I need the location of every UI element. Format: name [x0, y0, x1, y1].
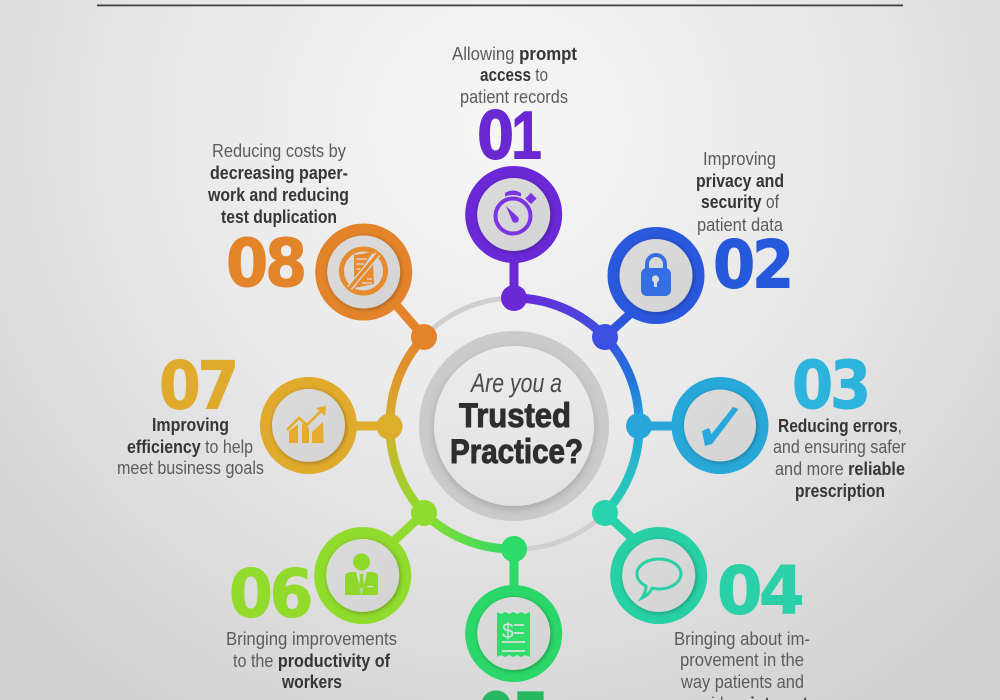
item 02 text: privacy and [696, 171, 784, 191]
item 03 text [773, 416, 906, 501]
item 05 [465, 536, 562, 700]
item 04 text: Bringing about im- [674, 629, 810, 649]
item 01 text: access to [480, 65, 548, 85]
item 01 text [452, 44, 577, 107]
item 02 badge [608, 227, 704, 324]
item 08 badge [315, 224, 412, 320]
item 07 connector [350, 414, 402, 440]
item 03 text: and ensuring safer [773, 437, 906, 457]
item 08 text: work and reducing [207, 185, 349, 205]
hub title: Are you a [469, 368, 562, 398]
icon: receipt: $ [502, 620, 514, 643]
icon: businessperson [345, 554, 378, 595]
item 03 badge [672, 377, 768, 474]
central ring: gray and gradient arcs [390, 298, 639, 549]
item 08 text: test duplication [221, 207, 337, 227]
item 02 text: Improving [703, 149, 776, 169]
top rule [97, 4, 903, 6]
item 08 text [207, 141, 349, 227]
item 06 [226, 500, 437, 692]
central hub [419, 331, 609, 521]
item 04 text: provement in the [680, 650, 804, 670]
item 08 text: decreasing paper- [210, 163, 348, 183]
item 01 [452, 44, 577, 311]
item 01 text: Allowing prompt [452, 44, 577, 64]
item 08 [207, 141, 437, 350]
item 05 connector [501, 536, 527, 591]
item 07 [117, 348, 402, 478]
item 03 connector [626, 413, 679, 439]
icon: check mark [702, 407, 738, 446]
item 02 text: patient data [697, 215, 784, 235]
item 07 text: meet business goals [117, 458, 264, 478]
item 06 text: to the productivity of [233, 651, 391, 671]
item 07 text: Improving [152, 415, 229, 435]
item 07 text [117, 415, 264, 478]
item 04 connector [592, 500, 632, 538]
item 07 text: efficiency to help [127, 437, 253, 457]
item 03 text: Reducing errors, [778, 416, 902, 436]
item 01 badge [465, 166, 562, 263]
item 02 number: 02 [713, 226, 791, 304]
item 07 badge [260, 377, 357, 474]
icon: growth chart [287, 406, 326, 443]
item 02 text [696, 149, 784, 235]
icon: receipt [497, 612, 530, 657]
icon: no paperwork [342, 249, 386, 293]
item 01 text: patient records [460, 87, 568, 107]
item 02 text: security of [701, 192, 780, 212]
item 02 [592, 149, 791, 350]
item 06 connector [395, 500, 437, 540]
item 01 connector [501, 255, 527, 311]
item 08 connector [397, 306, 437, 350]
item 06 text: Bringing improvements [226, 629, 397, 649]
item 01 number: 01 [477, 98, 540, 174]
item 06 text: workers [281, 672, 342, 692]
item 04 number: 04 [717, 552, 802, 630]
item 03 text: prescription [795, 481, 885, 501]
item 08 number: 08 [226, 225, 304, 302]
icon: stopwatch [496, 190, 537, 234]
item 04 badge [610, 527, 707, 624]
item 03 [626, 347, 906, 501]
hub title: Practice? [450, 433, 583, 471]
icon: speech bubble [637, 559, 681, 598]
item 07 number: 07 [159, 348, 236, 424]
item 04 text: way patients and [680, 672, 804, 692]
item 04 [592, 500, 810, 700]
item 04 text [674, 629, 810, 700]
item 06 text [226, 629, 397, 692]
item 03 text: and more reliable [775, 459, 905, 479]
item 05 badge [465, 585, 562, 682]
hub title [450, 368, 583, 471]
item 08 text: Reducing costs by [212, 141, 346, 161]
item 06 badge [314, 527, 411, 624]
item 02 connector [592, 314, 630, 350]
item 06 number: 06 [229, 556, 311, 632]
item 03 number: 03 [792, 347, 868, 424]
hub title: Trusted [459, 397, 571, 435]
icon: padlock [641, 255, 671, 296]
